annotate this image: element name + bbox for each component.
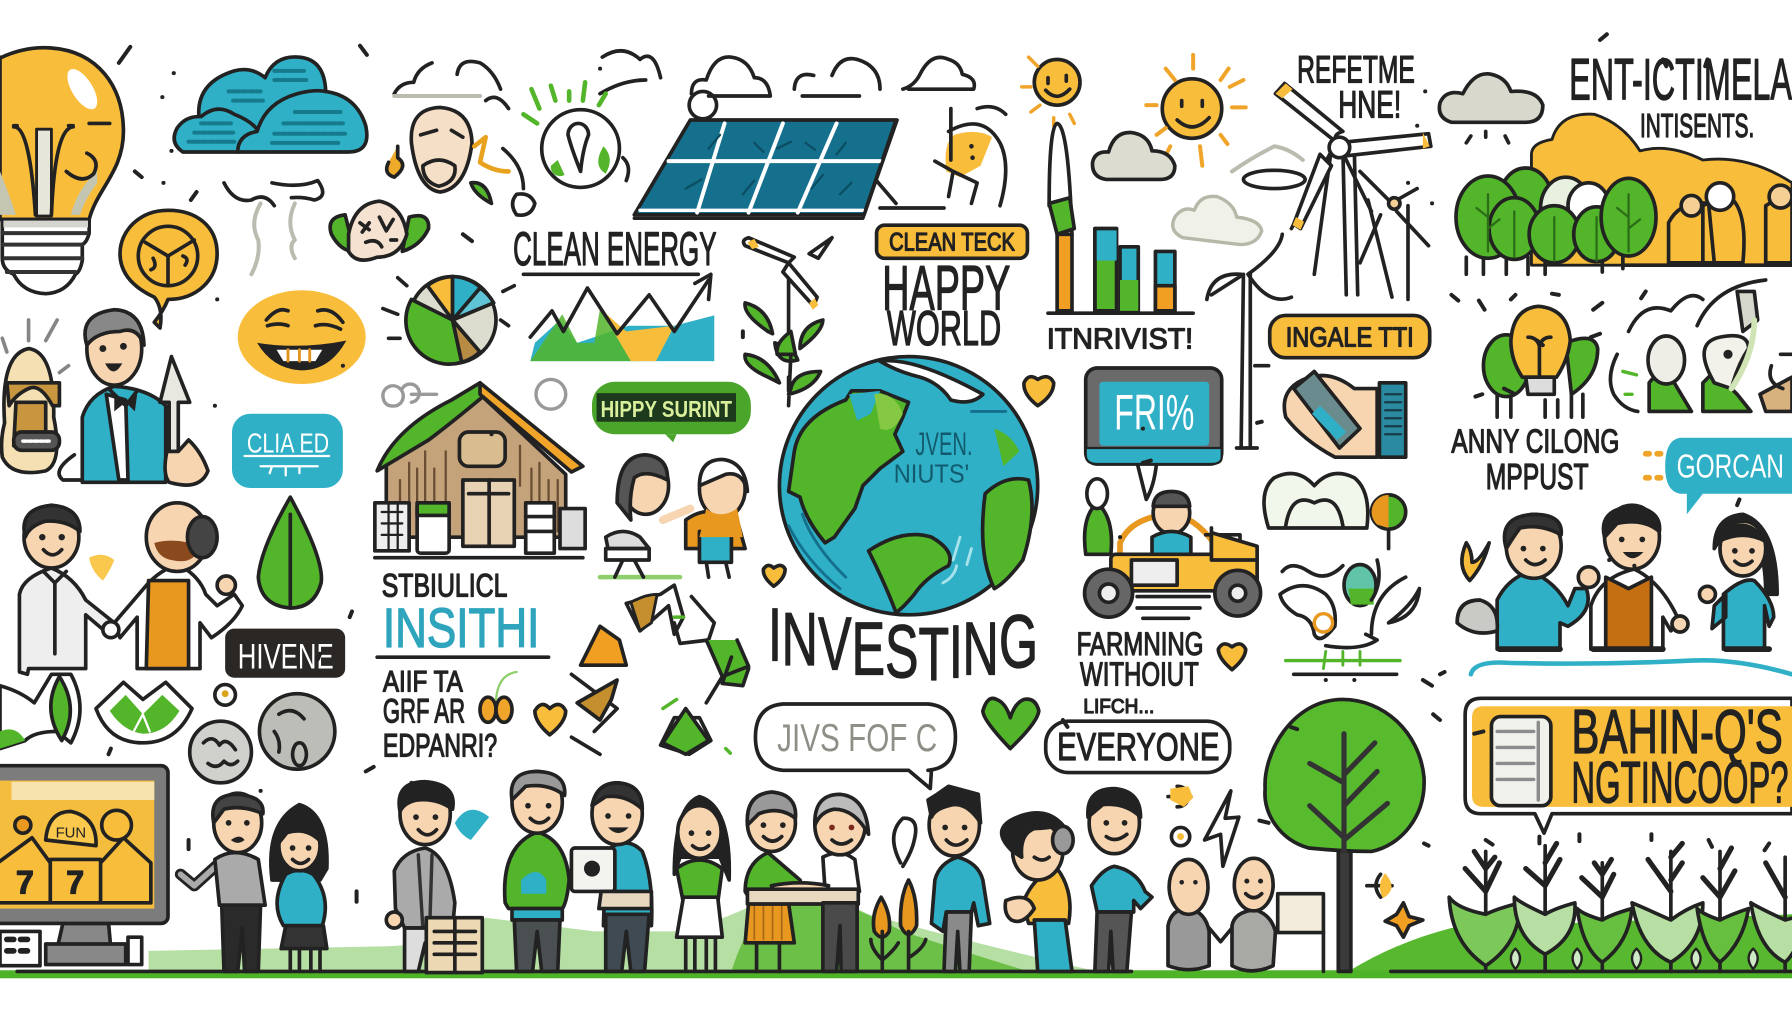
icon: green heart [983, 698, 1039, 749]
icon: globe [779, 357, 1038, 615]
badge: happy surint [592, 382, 751, 442]
illustration: sketch workers [1610, 280, 1792, 411]
heading: refetme hne [1297, 48, 1415, 126]
chart: pie [383, 277, 514, 364]
person: woman with bowl [1002, 813, 1073, 971]
icon: sparkles [1367, 873, 1423, 937]
person group: two grey figures with sign [1168, 858, 1323, 971]
icon: yellow heart [1024, 377, 1054, 406]
heart small [763, 565, 785, 586]
icon: recycling loop [571, 585, 749, 754]
icon: yellow heart right [1218, 644, 1246, 670]
steam squiggles [224, 181, 323, 274]
icon: butterfly [1462, 543, 1489, 581]
icon: monitor with houses: FUN [56, 826, 86, 842]
heading: clean energy: CLEAN ENERGY [513, 223, 717, 275]
icon: turbine sapling [743, 238, 832, 406]
text block: insight [377, 568, 549, 764]
icon: seeds and heart [480, 672, 566, 735]
person: woman in green [674, 797, 729, 971]
person: man with laptop [571, 783, 652, 971]
badge: ingale: INGALE TTI [1286, 321, 1414, 352]
person group: three friends [1457, 505, 1777, 649]
person: man in teal shirt [928, 786, 990, 971]
icon: small smiling sun [1022, 57, 1080, 126]
person: man with crate [386, 782, 489, 973]
person: man in green jacket [505, 771, 569, 971]
text block: anny cilong: MPPUST [1486, 456, 1589, 497]
text block: insight: AIIF TA [383, 665, 463, 698]
icons: leaf row [0, 674, 192, 749]
callout: yellow speech box [1465, 698, 1792, 833]
badge: clean teck: CLEAN TECK [889, 228, 1015, 256]
label: dark pill: HIVENE [238, 637, 334, 677]
icon: solar panel [634, 120, 944, 218]
icon: white bumps and small pie [1264, 473, 1406, 549]
icon: small sketch bulb [894, 818, 916, 866]
scattered dots and dashes [109, 34, 1769, 902]
icon: tree [1265, 699, 1424, 971]
callout: speech bubble: JIVS FOF C [777, 717, 937, 760]
icon: bulb circle with rays [523, 82, 628, 187]
heading: refetme hne: REFETME [1297, 48, 1415, 90]
icon: tablet with speech tail [1086, 368, 1222, 499]
icons: sprout row [1449, 843, 1792, 971]
text block: insight: INSITHI [383, 596, 539, 659]
chart: mountain line [530, 274, 714, 361]
clouds: sketch clouds row [394, 51, 974, 119]
icon: bulb with leaves [1483, 306, 1598, 417]
heading: entrepreneurial insights [1569, 47, 1792, 145]
badge: ingale [1270, 315, 1430, 358]
icon: globe: JVEN. [915, 426, 973, 462]
callout: teal bubble [1646, 438, 1792, 514]
icon: monitor with houses: 7 [16, 865, 34, 901]
person pair: handshake [19, 503, 242, 674]
text block: farming without: WITHOIUT [1080, 657, 1199, 694]
heading: investing: INVESTING [768, 592, 1038, 696]
label: dark pill [225, 629, 345, 678]
badge: everyone [1046, 721, 1230, 773]
icon: small grey doodles [383, 379, 566, 409]
icon: monitor with houses: 7 [66, 865, 84, 901]
heading: happy world: HAPPY [882, 254, 1010, 324]
person pair: two seated women [600, 455, 747, 577]
heading: refetme hne: HNE! [1338, 84, 1401, 126]
text block: insight: GRF AR [383, 692, 465, 730]
icon: hand holding card [935, 107, 1006, 206]
icon: green leaf [258, 497, 321, 608]
icon: monitor with houses [0, 766, 168, 966]
icon: globe: NIUTS' [894, 458, 969, 488]
icon: farm machine doodle [1280, 560, 1419, 674]
label: teal sign [232, 414, 343, 488]
icon: goblin face with leaves [330, 201, 429, 260]
person: man in teal suit [59, 310, 208, 485]
icon: small coin and lightning [1168, 786, 1239, 866]
badge: happy surint: HIPPY SURINT [601, 396, 732, 422]
icon: hand holding phone [1284, 371, 1406, 457]
person: man gesturing [181, 793, 265, 971]
badge: clean teck [877, 225, 1027, 258]
text block: farming without [1077, 626, 1203, 718]
text block: anny cilong: ANNY CILONG [1451, 424, 1619, 461]
icon: smiling yellow face [238, 290, 366, 384]
person: woman in teal [271, 805, 327, 971]
chart: bar chart with tower [1048, 123, 1193, 313]
icon: yellow speech bubble [120, 210, 217, 328]
icon: tractor and driver [1085, 479, 1261, 618]
cloud: top right [1439, 74, 1543, 143]
text block: insight: STBIULICL [382, 568, 507, 604]
heading: happy world [882, 254, 1010, 356]
icon: teal cloud with data [174, 57, 367, 152]
label: teal sign: CLIA ED [247, 428, 329, 459]
icon: bearded face [387, 107, 535, 215]
icon: corn plants [871, 880, 926, 971]
person group: two people at table [745, 792, 869, 971]
text block: anny cilong [1451, 424, 1619, 497]
person: man in teal [1088, 789, 1152, 971]
illustration: yellow hill with trees and people [1456, 114, 1792, 274]
text block: farming without: LIFCH... [1083, 695, 1154, 718]
label: itnrivist: ITNRIVIST! [1047, 324, 1193, 356]
text block: insight: EDPANRI? [383, 728, 497, 764]
callout: speech bubble [755, 704, 955, 789]
icon: large smiling sun [1146, 55, 1246, 166]
icon: lantern [2, 320, 69, 473]
icon: outlined clouds [1092, 133, 1305, 245]
icon: wind turbines [1207, 83, 1431, 448]
icons: grey circles [190, 685, 335, 783]
badge: everyone: EVERYONE [1057, 726, 1219, 769]
decorative teal wave [1471, 660, 1792, 674]
heading: happy world: WORLD [887, 302, 1001, 356]
text block: farming without: FARMNING [1077, 626, 1203, 662]
ground strip [0, 886, 1792, 978]
icon: large light bulb [0, 48, 123, 294]
icon: tablet with speech tail: FRI% [1114, 384, 1194, 441]
icon: house with green roof [375, 383, 585, 558]
